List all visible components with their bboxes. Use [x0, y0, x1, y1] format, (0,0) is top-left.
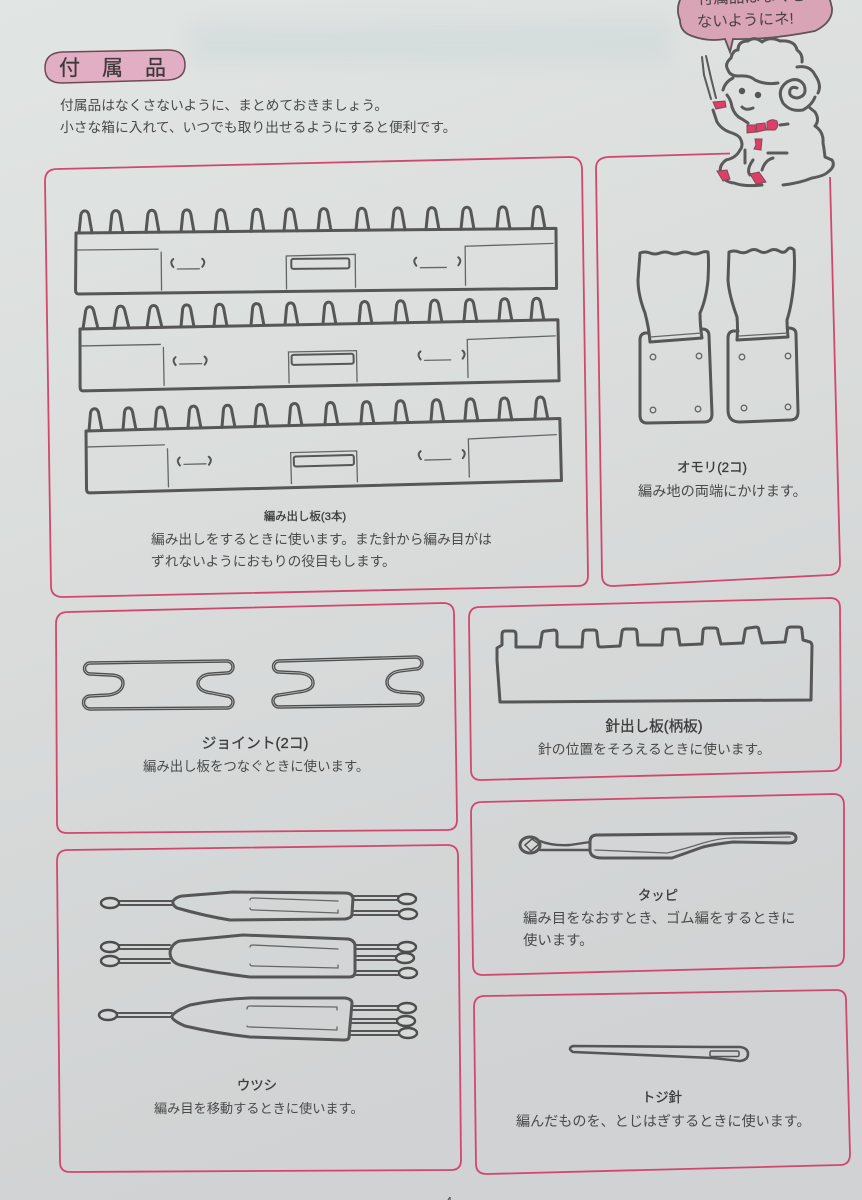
- panel: 針出し板: [469, 598, 841, 780]
- illustration: needle pusher board: [497, 627, 812, 702]
- illustration: weights: [638, 248, 798, 423]
- panel: トジ針: [474, 990, 850, 1174]
- illustration: transfer tool 1: [101, 892, 417, 920]
- description: tappet tool: 編み目をなおすとき、ゴム編をするときに: [523, 909, 795, 927]
- speech bubble: ないようにネ!: [697, 10, 794, 31]
- label: ジョイント(2コ): ジョイント(2コ): [202, 736, 309, 752]
- description: weights: 編み地の両端にかけます。: [638, 484, 807, 500]
- section heading pill: 付属品: 付属品: [59, 57, 188, 80]
- description: transfer tool: 編み目を移動するときに使います。: [154, 1100, 364, 1116]
- description: starter board: ずれないようにおもりの役目もします。: [151, 554, 396, 569]
- label: タッピ: タッピ: [638, 888, 678, 903]
- description: tappet tool: [523, 909, 795, 949]
- description: darning needle: 編んだものを、とじはぎするときに使います。: [516, 1113, 811, 1129]
- panel: ウツシ: [57, 845, 461, 1172]
- intro text: 付属品はなくさないように、まとめておきましょう。: [60, 98, 388, 113]
- panel: タッピ: [471, 794, 844, 975]
- illustration: tappet tool: [520, 833, 796, 858]
- description: starter board: 編み出しをするときに使います。また針から編み目がは: [151, 531, 492, 547]
- label: トジ針: トジ針: [642, 1090, 682, 1105]
- illustration: joints: [84, 657, 423, 709]
- label: 編み出し板(3本): 編み出し板(3本): [264, 509, 346, 523]
- description: needle pusher board: 針の位置をそろえるときに使います。: [538, 741, 771, 757]
- illustration: transfer tool 3: [99, 998, 417, 1040]
- panel: ジョイント: [56, 603, 457, 833]
- label: 針出し板(柄板): 針出し板(柄板): [605, 718, 703, 735]
- section heading pill: 付属品: [45, 50, 188, 83]
- illustration: starter board 2: [79, 298, 559, 391]
- panel: 編み出し板: [45, 157, 588, 597]
- description: tappet tool: 使います。: [523, 932, 594, 949]
- intro text: [60, 98, 456, 135]
- illustration: starter board 1: [75, 206, 557, 294]
- illustration: darning needle: [570, 1046, 748, 1061]
- panel: オモリ: [596, 154, 840, 586]
- label: オモリ(2コ): オモリ(2コ): [677, 460, 747, 475]
- speech bubble: [678, 0, 832, 52]
- illustration: starter board 3: [84, 397, 561, 493]
- sheep line drawing: [702, 39, 833, 186]
- description: starter board: [151, 531, 492, 569]
- label: ウツシ: ウツシ: [237, 1078, 277, 1093]
- intro text: 小さな箱に入れて、いつでも取り出せるようにすると便利です。: [60, 120, 456, 135]
- description: joints: 編み出し板をつなぐときに使います。: [143, 758, 369, 774]
- illustration: transfer tool 2: [101, 935, 417, 978]
- mascot: sheep with speech bubble and pointer: [678, 0, 833, 186]
